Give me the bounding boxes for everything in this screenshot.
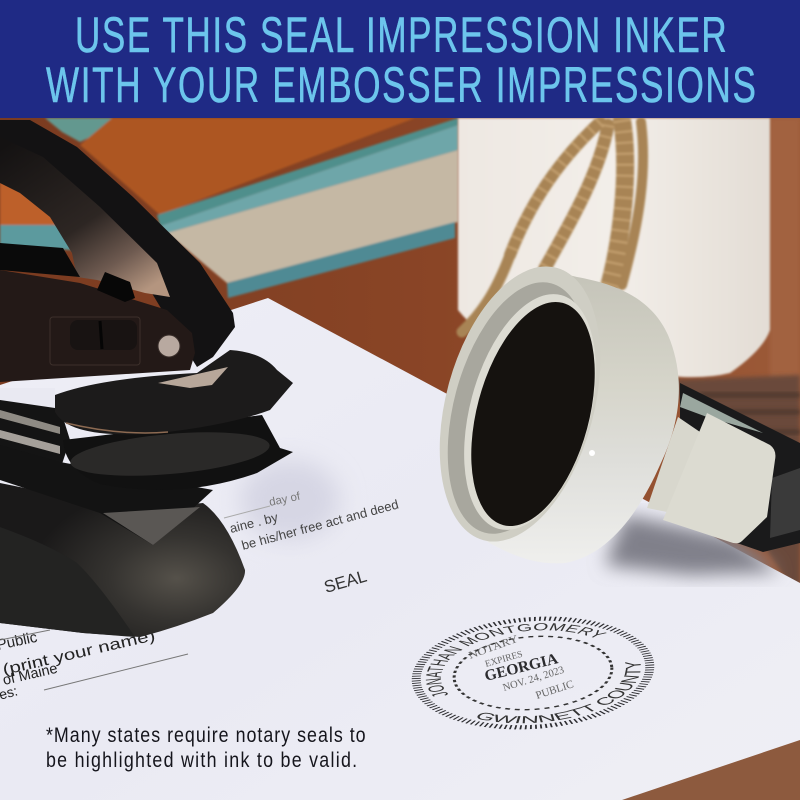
- embosser tool: [0, 120, 293, 637]
- SEAL label: SEAL: [322, 567, 369, 597]
- notary seal impression: [412, 616, 654, 730]
- embosser lower arm: [0, 396, 70, 470]
- black wedge: [0, 243, 80, 277]
- document line: free act and deed: be his/her free act and deed: [240, 497, 400, 553]
- embosser housing: [0, 270, 195, 382]
- paper sheet: [0, 298, 800, 800]
- embosser handle: [0, 120, 235, 367]
- small knob: [97, 272, 135, 302]
- title line 1: USE THIS SEAL IMPRESSION INKER: [75, 8, 727, 64]
- stamp neck: [647, 417, 700, 513]
- lower die disc: [63, 415, 293, 490]
- seal: date: NOV. 24, 2023: [502, 665, 566, 694]
- document line: Maine by: aine . by: [228, 509, 280, 536]
- footnote line 2: be highlighted with ink to be valid.: [46, 749, 357, 772]
- twine: [462, 120, 643, 332]
- top die disc: [55, 350, 293, 434]
- pre-inked stamp body: [647, 383, 800, 552]
- stamp grip: [663, 413, 775, 543]
- stack of books: [0, 118, 458, 298]
- printed document text: [0, 491, 400, 704]
- cap side: [473, 268, 679, 563]
- footnote line 1: *Many states require notary seals to: [46, 724, 366, 747]
- paper gap left of die: [0, 388, 55, 408]
- seal: public: PUBLIC: [534, 678, 575, 702]
- document line: print your name: (print your name): [1, 627, 157, 679]
- seal: expires: EXPIRES: [484, 650, 524, 670]
- embosser base: [0, 483, 245, 637]
- title banner: [0, 0, 800, 118]
- cap rim: [412, 249, 628, 559]
- seal name: JONATHAN MONTGOMERY: [426, 623, 607, 696]
- document line: day of: day of: [268, 491, 302, 509]
- seal county: GWINNETT COUNTY: [477, 662, 641, 724]
- seal: notary: NOTARY: [467, 634, 520, 662]
- lock switch: [50, 317, 140, 365]
- stamp cast shadow: [605, 515, 780, 575]
- seal dashed ring: [452, 631, 614, 715]
- seal tick ring: [413, 611, 653, 735]
- white vase with twine: [458, 118, 770, 377]
- document line: of Maine: of Maine: [1, 661, 59, 689]
- black ink pad: [449, 288, 617, 540]
- ink cap: [412, 249, 679, 563]
- title line 2: WITH YOUR EMBOSSER IMPRESSIONS: [46, 58, 756, 114]
- pivot rivet: [158, 335, 180, 357]
- seal: state: GEORGIA: [483, 650, 560, 685]
- footnote: [46, 724, 366, 772]
- cap highlight dot: [589, 450, 595, 456]
